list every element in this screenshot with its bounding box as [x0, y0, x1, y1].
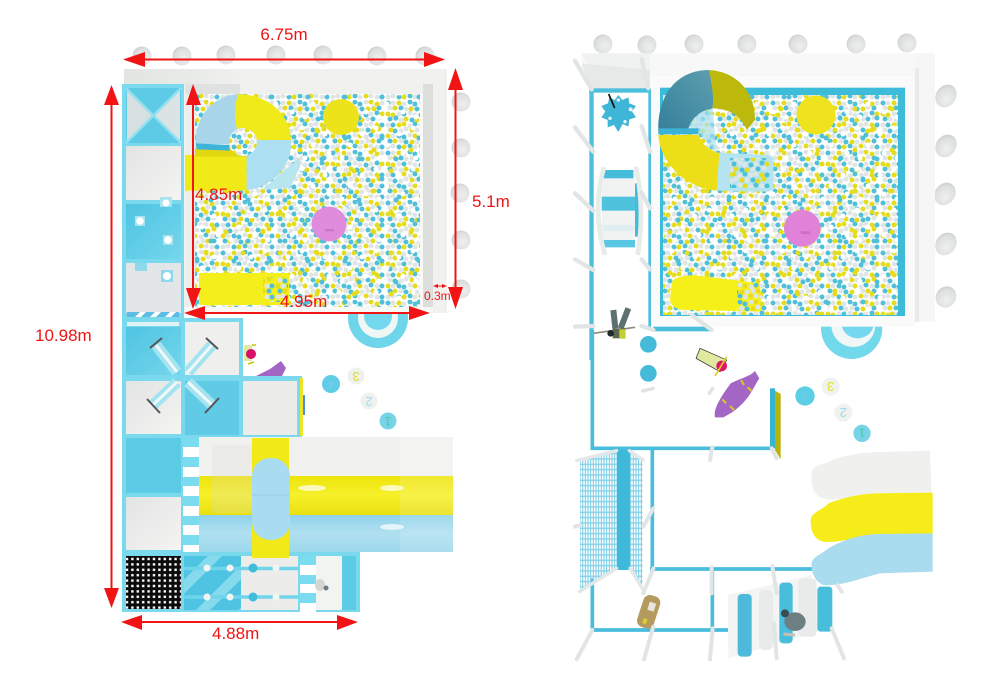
numbered stepping stones: 1 — [858, 426, 866, 441]
numbered stepping stones: 4 — [801, 388, 809, 403]
right view yellow ball — [796, 96, 836, 134]
white star cell with stripe — [126, 263, 181, 326]
purple bouncer — [715, 371, 759, 417]
left exit tube with balls — [262, 157, 300, 190]
spiral slide centre hole — [229, 128, 257, 156]
blue stones — [640, 336, 713, 393]
white tall cell — [126, 497, 181, 550]
dimension: 4.88m tower width: 4.88m — [212, 624, 259, 643]
right view drum stairs — [598, 167, 641, 255]
small bouncer character — [244, 345, 256, 364]
dimension: 4.88m tower width — [121, 615, 358, 643]
floor posts lower — [575, 447, 844, 659]
dimension: 10.98m total height — [35, 85, 119, 608]
right view exit balls — [730, 158, 770, 188]
triple wave slides — [199, 437, 453, 552]
numbered stepping stones: 3 — [827, 379, 834, 394]
person climbing — [781, 609, 806, 635]
right view posts right — [930, 80, 961, 312]
dimension: 4.85m pit depth — [186, 84, 242, 309]
ball pit balls — [195, 94, 420, 307]
panel: right perspective view — [575, 34, 961, 659]
dimension: 4.85m pit depth: 4.85m — [195, 185, 242, 204]
pink pig obstacle — [312, 206, 348, 242]
stepping stones with numbers — [322, 368, 396, 430]
small figure — [315, 579, 328, 591]
dimension: 10.98m total height: 10.98m — [35, 326, 92, 345]
bouncer character — [696, 348, 727, 376]
left view perimeter posts top — [132, 46, 434, 66]
spiral tube slide — [185, 94, 291, 191]
right view wall and cyan rim — [582, 53, 935, 331]
blue tall cell — [126, 438, 181, 493]
right view corridor frame — [589, 88, 651, 360]
white cell — [126, 146, 181, 200]
right view yellow slide balls — [737, 283, 762, 312]
stepping stones with numbers: 3 — [352, 369, 360, 384]
numbered stepping stones — [795, 378, 871, 442]
stepping stones with numbers: 1 — [384, 414, 392, 429]
dimension: 5.1m height: 5.1m — [472, 192, 510, 211]
striped slide entry — [183, 438, 199, 552]
right view lower structure — [575, 330, 933, 659]
flat yellow slide — [199, 273, 289, 305]
stepping stones with numbers: 4 — [327, 377, 334, 391]
left view perimeter posts right — [450, 92, 470, 298]
climbing nets — [577, 450, 643, 592]
dimension: 6.75m width — [123, 25, 445, 67]
three curved slides — [811, 451, 933, 585]
ball pit wall frame — [124, 69, 447, 313]
blue star cell — [126, 197, 181, 259]
transparent exit tube — [717, 153, 773, 192]
dimension: 4.95m pit width: 4.95m — [280, 292, 327, 311]
right view yellow slide — [670, 275, 762, 312]
second tower column — [184, 318, 305, 438]
round step platform — [348, 288, 408, 348]
upright panel — [770, 388, 781, 459]
yellow ball obstacle — [323, 99, 359, 135]
brown bouncer — [635, 593, 662, 630]
white tunnel cell — [126, 381, 181, 434]
right view spiked ball — [601, 94, 636, 132]
bottom tower row frame — [184, 552, 360, 612]
vertical tube slide — [252, 438, 290, 558]
dimension: 4.95m pit width — [184, 292, 430, 320]
striped ramp — [300, 555, 316, 613]
blue tunnel cell — [126, 327, 181, 375]
right view posts top — [594, 34, 916, 54]
right view spiral tube slide — [658, 70, 773, 192]
right view pig — [784, 209, 821, 247]
roller climb wall — [728, 575, 832, 658]
cell with diagonal cross — [126, 88, 181, 143]
right view corner posts upper — [575, 59, 712, 330]
right view person lying — [593, 308, 635, 339]
purple bouncer — [256, 361, 286, 376]
dimension: 0.3m wall: 0.3m — [424, 289, 451, 303]
stepping stones with numbers: 2 — [365, 394, 373, 409]
dimension: 5.1m height — [448, 68, 510, 309]
cyan floor frames — [592, 330, 813, 630]
right view round platform — [821, 298, 882, 359]
crossed tunnels — [147, 338, 219, 413]
black dot mat — [126, 556, 181, 609]
right view ball pit balls — [663, 95, 898, 315]
panel: left top view plan — [122, 46, 470, 613]
numbered stepping stones: 2 — [840, 405, 847, 420]
left tower column frame — [122, 84, 184, 612]
dimension: 6.75m width: 6.75m — [260, 25, 308, 44]
